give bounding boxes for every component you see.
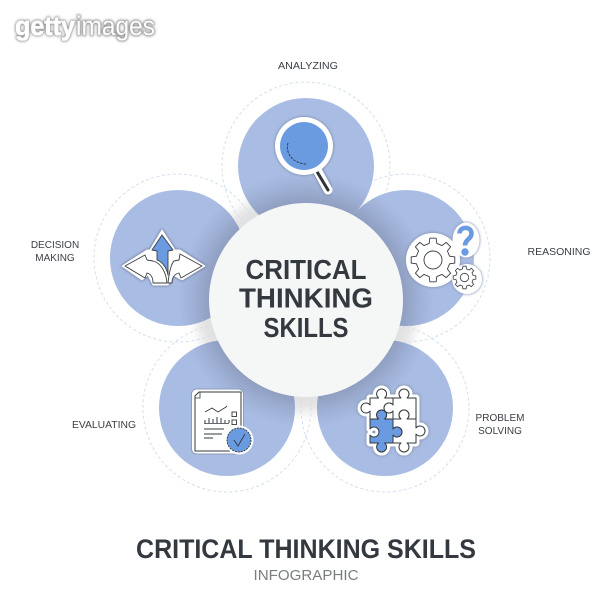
icon: magnifying glass: [274, 116, 334, 190]
watermark: getty: [15, 11, 75, 41]
label: decision making: [31, 240, 79, 264]
petal: problem solving: [317, 340, 453, 476]
label: analyzing: ANALYZING: [278, 61, 338, 72]
label: problem solving: SOLVING: [478, 426, 522, 437]
center circle: [209, 203, 403, 397]
center title: THINKING: [239, 282, 373, 314]
petal: decision making: [110, 190, 246, 326]
watermark: getty: [15, 11, 75, 41]
petal: evaluating: [159, 340, 295, 476]
petal: analyzing: [238, 98, 374, 234]
main title: CRITICAL THINKING SKILLS: [136, 534, 476, 564]
label: decision making: DECISION: [31, 240, 79, 251]
watermark: [15, 11, 155, 41]
icon: three-way arrows: [122, 230, 205, 285]
watermark: images: [76, 11, 155, 41]
label: decision making: MAKING: [35, 253, 75, 264]
icon: report with check badge: [192, 389, 254, 454]
icon: gears and question mark: [405, 222, 482, 294]
center title: [239, 254, 373, 343]
label: reasoning: REASONING: [528, 247, 591, 258]
center title: SKILLS: [264, 312, 348, 343]
icon: puzzle pieces: [361, 389, 425, 452]
watermark: images: [76, 11, 155, 41]
label: evaluating: EVALUATING: [72, 420, 136, 431]
petal: reasoning: [338, 190, 474, 326]
label: problem solving: [476, 413, 524, 437]
center shadow: [194, 188, 418, 412]
label: problem solving: PROBLEM: [476, 413, 524, 424]
subtitle: INFOGRAPHIC: [254, 568, 358, 584]
center title: CRITICAL: [246, 254, 366, 285]
dashed rings: [94, 82, 490, 492]
